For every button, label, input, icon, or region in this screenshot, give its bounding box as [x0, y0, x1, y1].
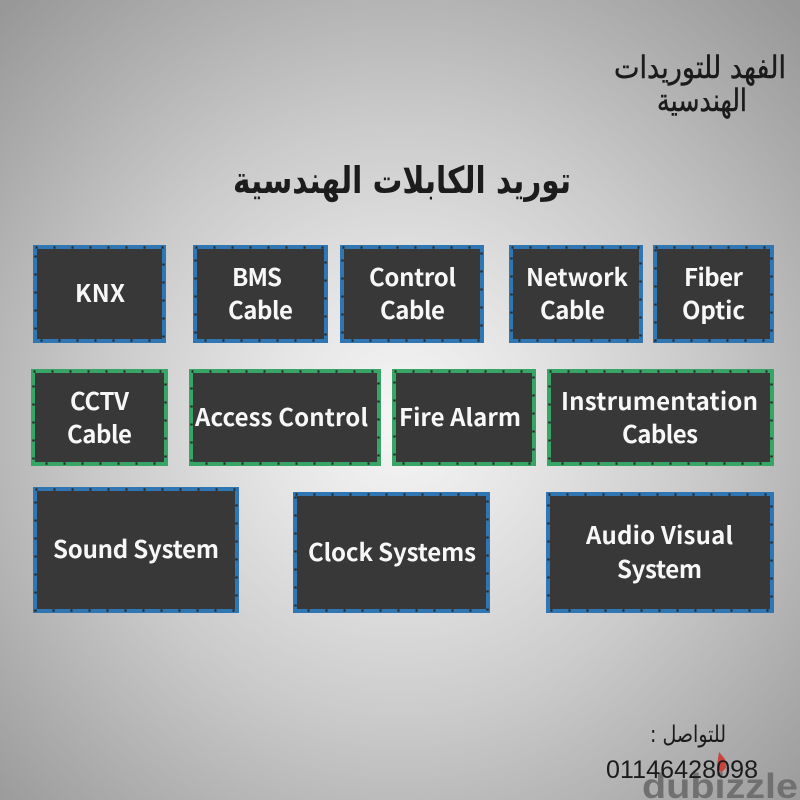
box: Network Cable: Network: [526, 258, 628, 293]
box: Control Cable: Control: [369, 258, 456, 293]
box: Audio Visual System: [548, 494, 772, 611]
box: Audio Visual System: System: [617, 550, 702, 585]
phone number: 01146428098: [606, 756, 758, 784]
box: BMS Cable: [195, 247, 326, 341]
box: Audio Visual System: Audio Visual: [585, 516, 733, 551]
box: Sound System: Sound System: [53, 530, 219, 565]
box: KNX: KNX: [75, 274, 125, 309]
box: Instrumentation Cables: Cables: [622, 415, 698, 450]
box: Control Cable: [342, 247, 482, 341]
box: KNX: [35, 247, 164, 341]
box: Fiber Optic: Fiber: [684, 258, 744, 293]
box: CCTV Cable: [33, 371, 166, 464]
box: Clock Systems: Clock Systems: [308, 533, 476, 568]
box: Instrumentation Cables: [549, 371, 772, 464]
box: Network Cable: [511, 247, 641, 341]
box: Access Control: Access Control: [194, 398, 368, 433]
box: Control Cable: Cable: [380, 291, 445, 326]
box: Sound System: [35, 489, 237, 611]
box: CCTV Cable: CCTV: [70, 382, 129, 417]
box: CCTV Cable: Cable: [67, 415, 132, 450]
box: Fire Alarm: Fire Alarm: [399, 398, 521, 433]
box: BMS Cable: Cable: [228, 291, 293, 326]
title: توريد الكابلات الهندسية: [233, 159, 571, 202]
box: Fiber Optic: Optic: [682, 291, 745, 326]
box: BMS Cable: BMS: [232, 258, 282, 293]
contact label: للتواصل :: [650, 722, 726, 748]
box: Clock Systems: [295, 494, 488, 611]
logo: company name: الهندسية: [657, 83, 747, 119]
box: Instrumentation Cables: Instrumentation: [561, 382, 758, 417]
logo: company name: [614, 50, 786, 119]
box: Fire Alarm: [394, 371, 534, 464]
box: Access Control: [191, 371, 379, 464]
box: Fiber Optic: [655, 247, 772, 341]
watermark: dubizzle: [642, 752, 798, 800]
box: Network Cable: Cable: [540, 291, 605, 326]
